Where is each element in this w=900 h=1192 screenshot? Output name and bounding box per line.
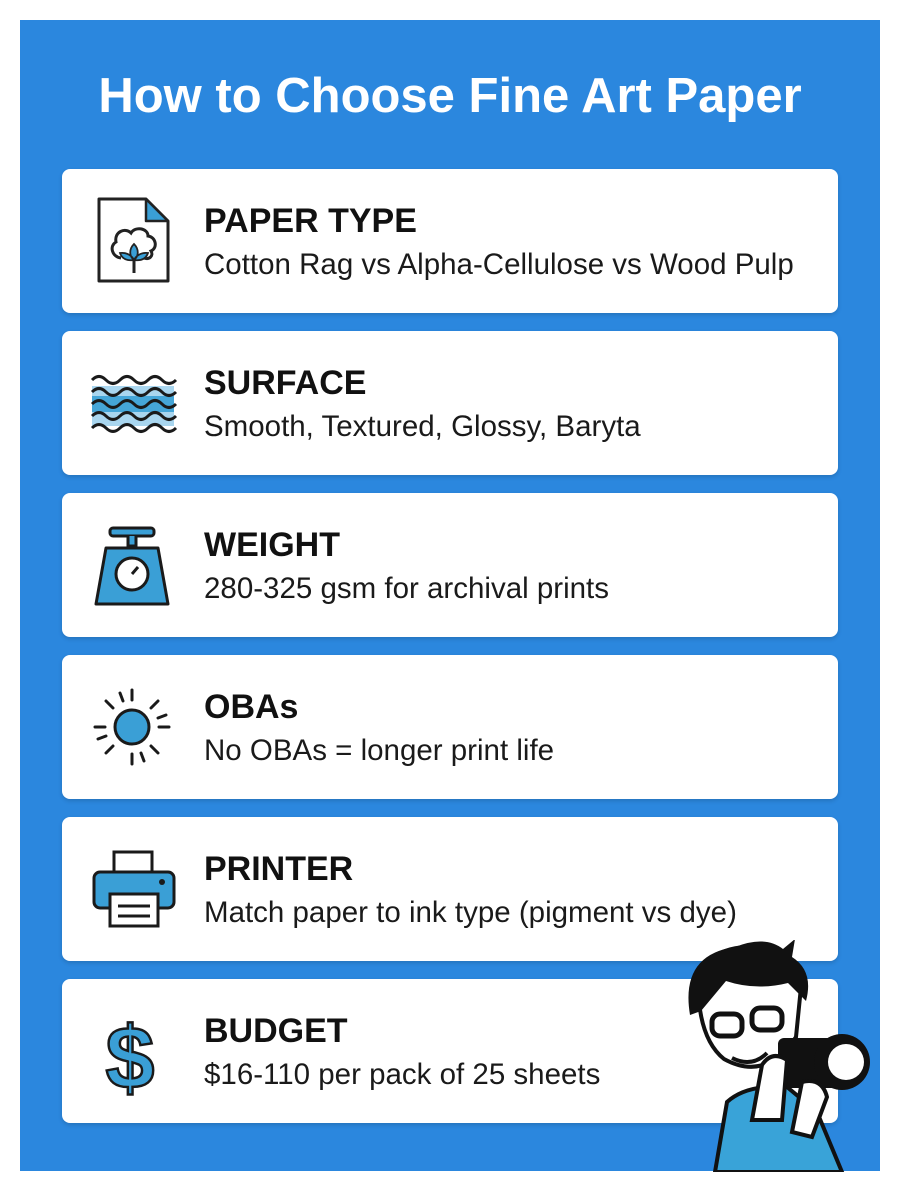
text: $16-110 per pack of 25 sheets [204,1058,600,1091]
heading: PAPER TYPE [204,202,417,240]
card: budget [62,979,838,1123]
heading: BUDGET [204,1012,348,1050]
text: No OBAs = longer print life [204,734,554,767]
heading: WEIGHT [204,526,340,564]
text: Smooth, Textured, Glossy, Baryta [204,410,641,443]
card: OBAs [62,655,838,799]
card: surface [62,331,838,475]
text: 280-325 gsm for archival prints [204,572,609,605]
illustration: photographer [688,940,870,1172]
icon: waves [91,374,177,434]
heading: PRINTER [204,850,353,888]
title: How to Choose Fine Art Paper [98,69,802,123]
card: paper type [62,169,838,313]
icon: scale [94,526,170,606]
text: Cotton Rag vs Alpha-Cellulose vs Wood Pulp [204,248,794,281]
icon: cotton paper [98,198,170,282]
card: weight [62,493,838,637]
icon: sun [94,688,170,766]
icon: printer [92,850,176,928]
card: printer [62,817,838,961]
text: Match paper to ink type (pigment vs dye) [204,896,737,929]
heading: OBAs [204,688,298,726]
heading: SURFACE [204,364,366,402]
